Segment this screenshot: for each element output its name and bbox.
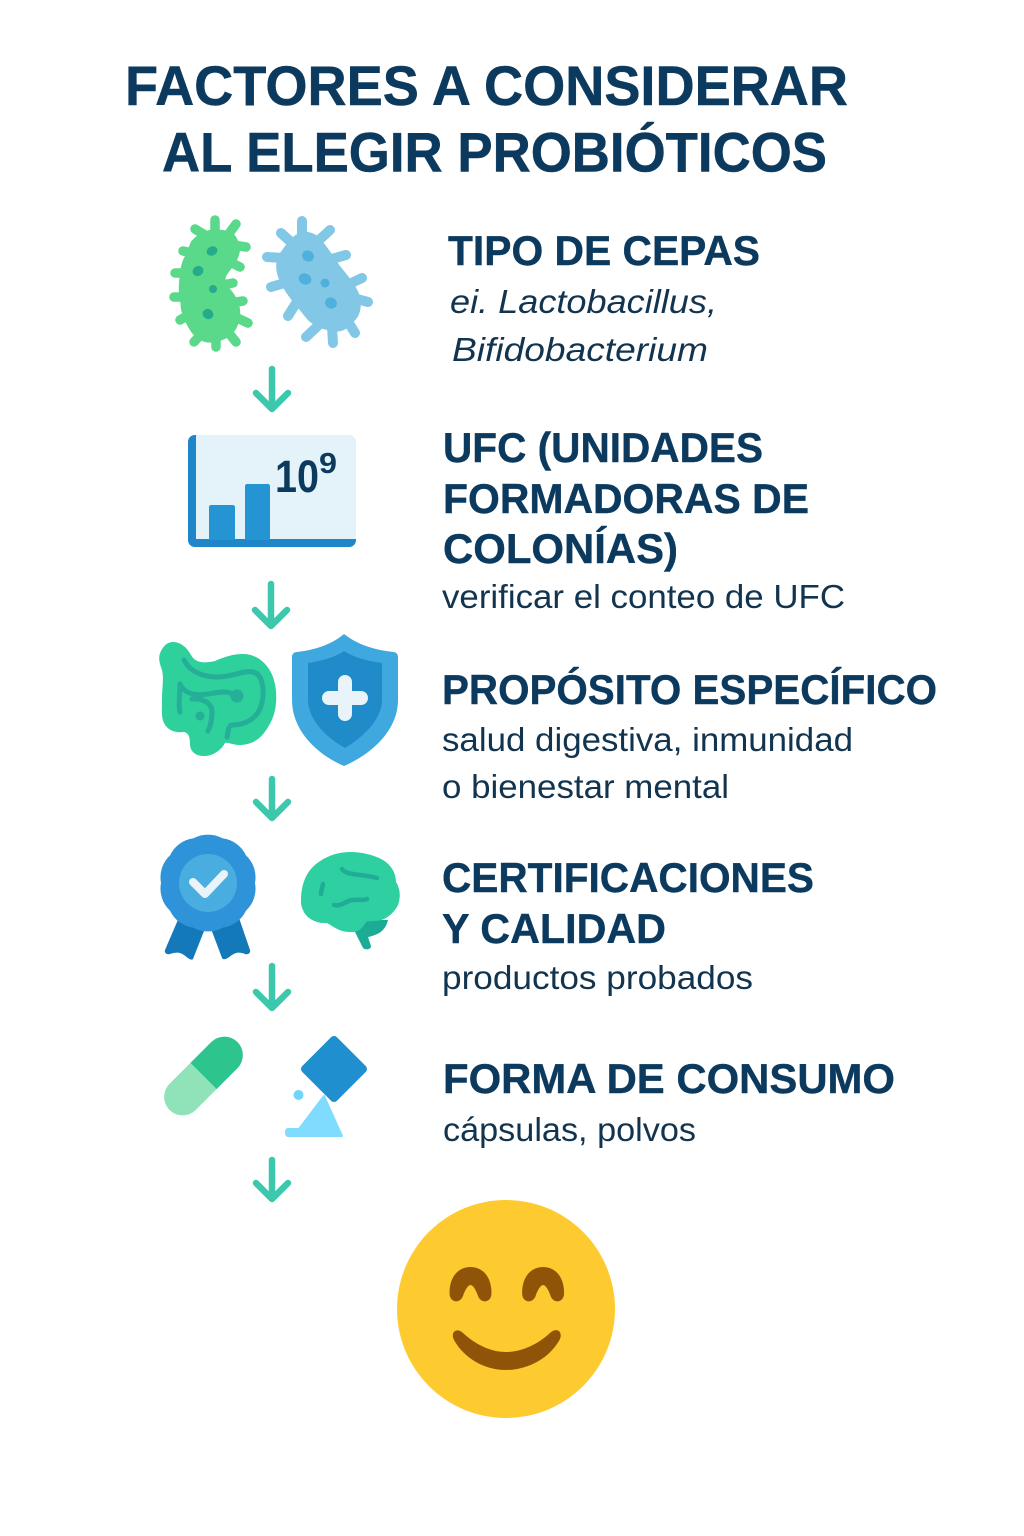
arrow 3 [256, 779, 288, 818]
text: purposes: salud digestiva, inmunidad [442, 721, 853, 758]
icon: bar chart with 10 to the 9 [188, 435, 356, 547]
icon: intestine [159, 642, 276, 756]
icon: brain [301, 852, 400, 949]
icon: bar chart with 10 to the 9: 9 [319, 448, 337, 480]
icon: shield with cross [292, 634, 398, 766]
title [125, 54, 848, 184]
arrow 5 [256, 1160, 288, 1199]
icon: bar chart with 10 to the 9: 10 [275, 451, 319, 502]
heading: UFC: FORMADORAS DE [443, 475, 809, 522]
title: FACTORES A CONSIDERAR [125, 54, 848, 117]
icon: blue bacterium [267, 221, 368, 343]
icon: smiling face [397, 1200, 615, 1418]
arrow 2 [255, 584, 287, 626]
text: examples of strains [450, 283, 717, 368]
text: capsules, powders: cápsulas, polvos [443, 1111, 696, 1148]
text: purposes [442, 721, 853, 805]
heading: forma de consumo: FORMA DE CONSUMO [443, 1055, 895, 1102]
panel: UFC [188, 424, 845, 615]
panel: certificaciones y calidad [160, 835, 814, 996]
text: examples of strains: ei. Lactobacillus, [450, 283, 717, 320]
text: purposes: o bienestar mental [442, 768, 729, 805]
icon: certification rosette [160, 835, 256, 960]
text: tested products: productos probados [442, 959, 753, 996]
icon: powder [286, 1034, 369, 1136]
arrow 1 [256, 369, 288, 409]
panel: tipo de cepas [174, 220, 760, 368]
heading: UFC: UFC (UNIDADES [443, 424, 763, 471]
title: AL ELEGIR PROBIÓTICOS [162, 120, 827, 184]
arrow 4 [256, 966, 288, 1008]
heading: certificaciones y calidad: Y CALIDAD [442, 905, 666, 952]
heading: certificaciones y calidad [442, 854, 814, 952]
text: verify count: verificar el conteo de UFC [442, 578, 845, 615]
heading: tipo de cepas: TIPO DE CEPAS [448, 227, 760, 274]
heading: UFC [443, 424, 809, 572]
icon: green bacterium [174, 220, 248, 347]
panel: propósito específico [159, 634, 937, 805]
panel: forma de consumo [156, 1029, 895, 1148]
heading: propósito específico: PROPÓSITO ESPECÍFICO [442, 665, 937, 713]
heading: certificaciones y calidad: CERTIFICACIONES [442, 854, 814, 901]
text: examples of strains: Bifidobacterium [452, 331, 708, 368]
icon: capsule [156, 1029, 251, 1123]
heading: UFC: COLONÍAS) [443, 525, 678, 572]
